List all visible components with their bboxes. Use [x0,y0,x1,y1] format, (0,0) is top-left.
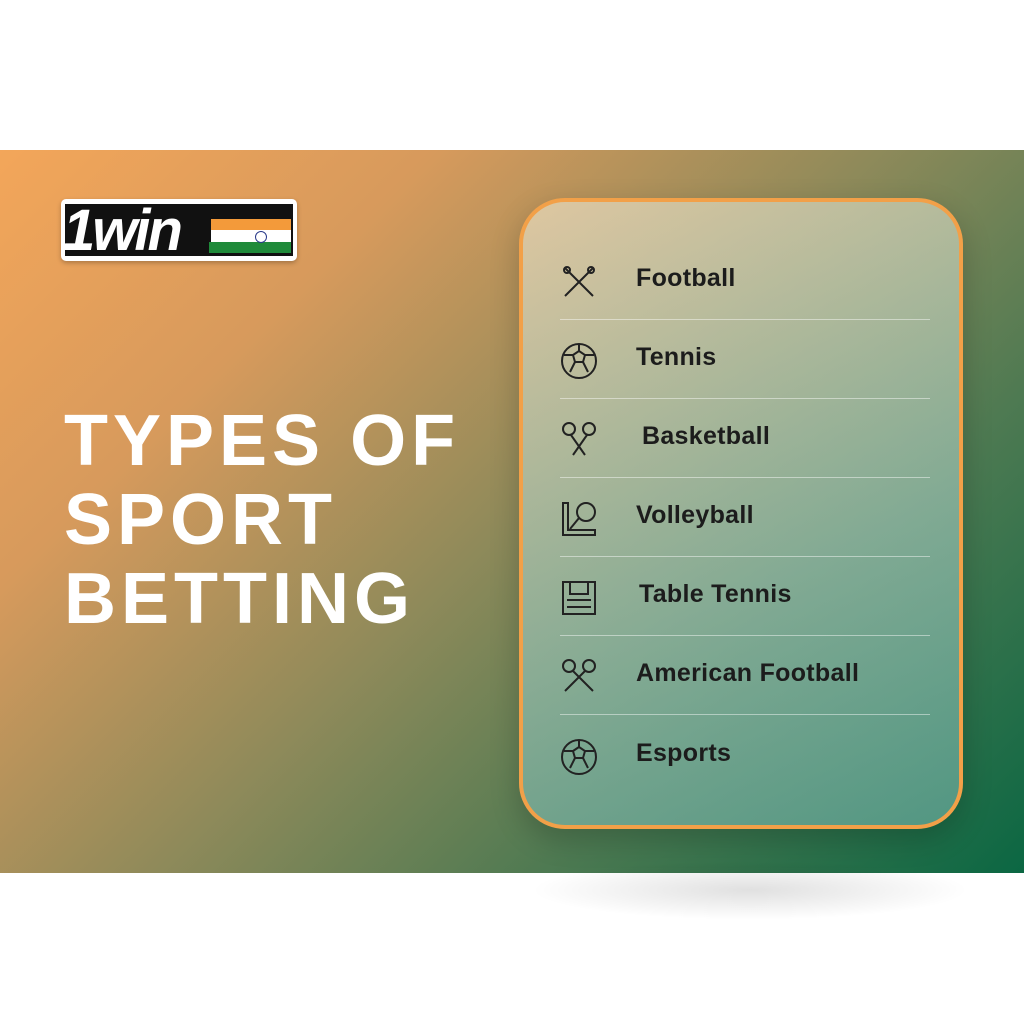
item: Esports [561,739,731,775]
item: Tennis [561,343,717,379]
item: Volleyball [562,501,754,536]
logo: 1win india: 1win [63,198,180,263]
item: Esports: Esports [636,739,731,767]
title: BETTING [64,559,415,639]
item: Table Tennis [562,580,792,615]
background band [0,150,1024,873]
item: Basketball: Basketball [642,422,770,450]
item: Basketball [562,422,770,456]
title: SPORT [64,480,337,560]
item: Football [563,264,736,297]
item: American Football [562,659,859,692]
item: Tennis: Tennis [636,343,717,371]
item: Table Tennis: Table Tennis [639,580,792,608]
panel: sports list [519,198,963,829]
logo: 1win india [61,199,297,261]
item: Football: Football [636,264,736,292]
title: TYPES OF [64,401,460,481]
item: Volleyball: Volleyball [636,501,754,529]
item: American Football: American Football [636,659,859,687]
title [64,401,460,639]
